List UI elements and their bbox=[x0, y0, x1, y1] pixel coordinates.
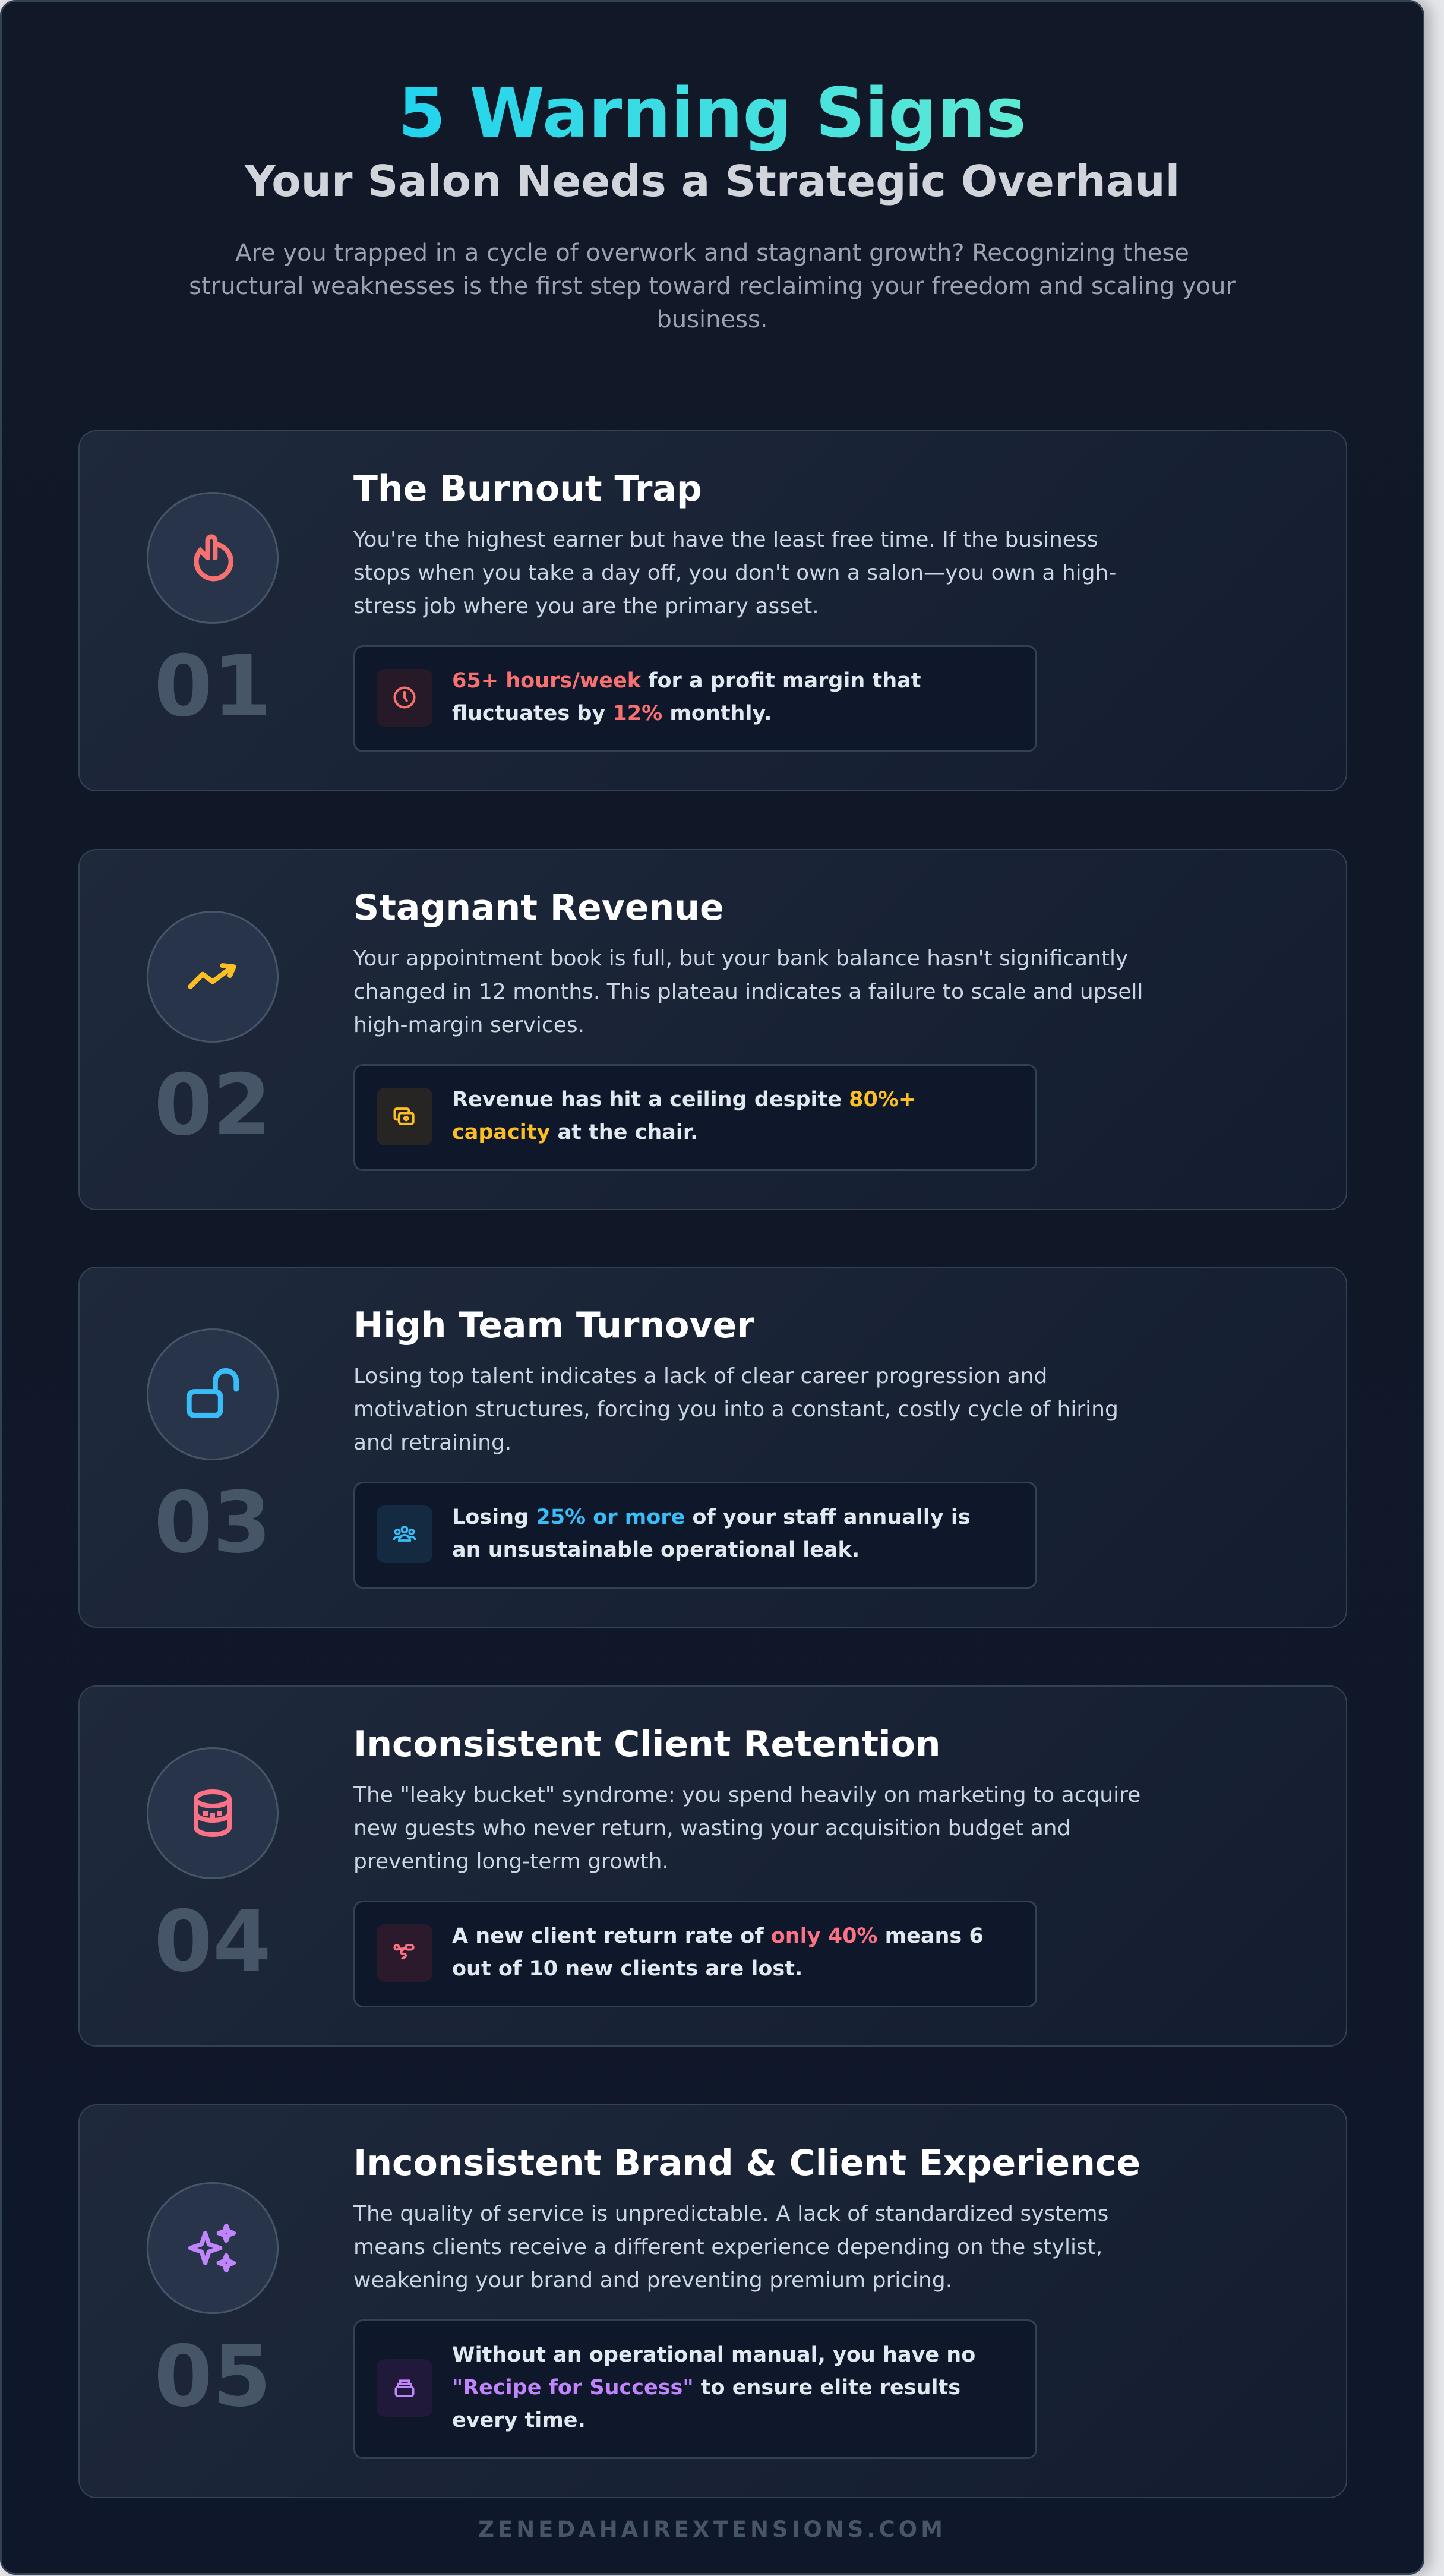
intro text bbox=[189, 239, 1236, 333]
heading: The Burnout Trap bbox=[353, 468, 702, 510]
number 02: 02 bbox=[154, 1056, 271, 1154]
description bbox=[353, 2202, 1108, 2293]
description: and retraining. bbox=[353, 1431, 511, 1455]
icon: box bbox=[377, 2359, 432, 2417]
number 05: 05 bbox=[154, 2328, 271, 2426]
stat callout: out of 10 new clients are lost. bbox=[452, 1957, 802, 1981]
panel: client retention bbox=[78, 1685, 1347, 2047]
stat callout: an unsustainable operational leak. bbox=[452, 1538, 860, 1562]
description bbox=[353, 1364, 1118, 1455]
icon: sparkles bbox=[147, 2182, 279, 2314]
description: changed in 12 months. This plateau indicates a failure to scale and upsell bbox=[353, 980, 1143, 1004]
panel: stagnant revenue bbox=[78, 849, 1347, 1210]
number 03: 03 bbox=[154, 1473, 271, 1572]
description: Losing top talent indicates a lack of clear career progression and bbox=[353, 1364, 1047, 1388]
panel: team turnover bbox=[78, 1267, 1347, 1628]
icon: leaky bucket bbox=[147, 1747, 279, 1879]
panel: burnout trap bbox=[78, 430, 1347, 791]
icon: broken link bbox=[377, 1924, 432, 1982]
number 01: 01 bbox=[154, 637, 271, 735]
description bbox=[353, 528, 1116, 618]
subtitle: Your Salon Needs a Strategic Overhaul bbox=[245, 156, 1180, 206]
description bbox=[353, 946, 1143, 1037]
stat callout bbox=[353, 1064, 1037, 1171]
stat callout: Losing 25% or more of your staff annually is bbox=[452, 1505, 971, 1529]
stat callout: "Recipe for Success" to ensure elite results bbox=[452, 2376, 960, 2400]
stat callout bbox=[353, 1901, 1037, 2007]
stat callout: fluctuates by 12% monthly. bbox=[452, 702, 772, 725]
footer: ZENEDAHAIREXTENSIONS.COM bbox=[478, 2517, 946, 2542]
stat callout: Revenue has hit a ceiling despite 80%+ bbox=[452, 1088, 916, 1112]
stat callout: capacity at the chair. bbox=[452, 1120, 698, 1144]
stat callout: Without an operational manual, you have no bbox=[452, 2343, 975, 2367]
stat callout bbox=[353, 645, 1037, 752]
description: You're the highest earner but have the least free time. If the business bbox=[353, 528, 1098, 552]
intro text: Are you trapped in a cycle of overwork and stagnant growth? Recognizing these bbox=[235, 239, 1189, 267]
heading: Inconsistent Brand & Client Experience bbox=[353, 2142, 1140, 2184]
description: weakening your brand and preventing premium pricing. bbox=[353, 2268, 952, 2293]
description: motivation structures, forcing you into a constant, costly cycle of hiring bbox=[353, 1397, 1118, 1422]
stat callout: every time. bbox=[452, 2408, 586, 2432]
description: high-margin services. bbox=[353, 1013, 584, 1037]
description: stress job where you are the primary asset. bbox=[353, 594, 819, 618]
heading: Stagnant Revenue bbox=[353, 887, 724, 929]
heading: Inconsistent Client Retention bbox=[353, 1723, 941, 1765]
intro text: structural weaknesses is the first step toward reclaiming your freedom and scaling your bbox=[189, 273, 1236, 300]
icon: banknotes bbox=[377, 1087, 432, 1145]
number 04: 04 bbox=[154, 1893, 271, 1990]
icon: trending up bbox=[147, 910, 279, 1042]
description: Your appointment book is full, but your bank balance hasn't significantly bbox=[353, 946, 1128, 971]
intro text: business. bbox=[656, 306, 768, 333]
title: 5 Warning Signs bbox=[398, 74, 1026, 153]
icon: users bbox=[377, 1505, 432, 1562]
stat callout: A new client return rate of only 40% means 6 bbox=[452, 1924, 984, 1948]
description: The "leaky bucket" syndrome: you spend heavily on marketing to acquire bbox=[353, 1783, 1140, 1807]
stat callout: 65+ hours/week for a profit margin that bbox=[452, 669, 921, 693]
icon: unlocked padlock bbox=[147, 1328, 279, 1460]
panel: brand experience bbox=[78, 2104, 1347, 2498]
description: The quality of service is unpredictable. A lack of standardized systems bbox=[353, 2202, 1108, 2226]
description bbox=[353, 1783, 1140, 1874]
stat callout bbox=[353, 1482, 1037, 1589]
description: stops when you take a day off, you don't own a salon—you own a high- bbox=[353, 561, 1116, 585]
description: new guests who never return, wasting your acquisition budget and bbox=[353, 1816, 1070, 1841]
heading: High Team Turnover bbox=[353, 1305, 754, 1346]
description: preventing long-term growth. bbox=[353, 1849, 669, 1874]
icon: clock bbox=[377, 669, 432, 726]
icon: hand bbox=[147, 492, 279, 624]
stat callout bbox=[353, 2319, 1037, 2459]
description: means clients receive a different experience depending on the stylist, bbox=[353, 2235, 1102, 2259]
